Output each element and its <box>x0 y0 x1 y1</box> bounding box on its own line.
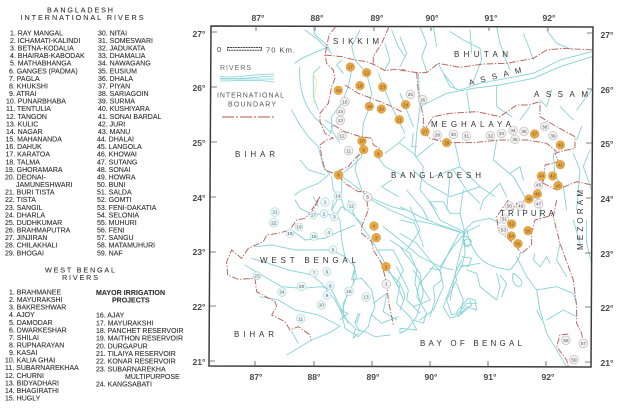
markers: lower west quadrant: 7 <box>313 271 316 276</box>
markers: upper east quadrant: 46 <box>535 192 540 197</box>
list: irrigation projects: 21. TILAIYA RESERVOIR <box>96 351 176 358</box>
list: West Bengal rivers: 10. KALIA GHAI <box>5 358 55 365</box>
markers: upper east quadrant: 50 <box>507 204 512 209</box>
list: Bangladesh rivers column 2: 34. NAWAGANG <box>98 61 151 68</box>
list: West Bengal rivers: 4. AJOY <box>9 312 35 319</box>
list: Bangladesh rivers column 2: 41. SONAI BARDAL <box>98 114 162 121</box>
list: Bangladesh rivers column 1: 2. ICHAMATI-KALINDI <box>10 38 80 45</box>
place labels: BAY OF BENGAL <box>420 339 523 348</box>
markers: lower west quadrant: 5 <box>332 247 335 252</box>
heading: Bangladesh international rivers: INTERNATIONAL RIVERS <box>20 13 144 22</box>
longitude and latitude labels: 89° <box>366 372 380 382</box>
markers: upper east quadrant: 30 <box>451 132 456 137</box>
list: Bangladesh rivers column 1: 10. PUNARBHABA <box>6 99 66 106</box>
map ticks <box>209 26 593 366</box>
markers: lower east quadrant: 59 <box>571 357 577 362</box>
list: Bangladesh rivers column 1: 27. JINJIRAN <box>5 235 47 242</box>
longitude and latitude labels: 91° <box>484 13 498 23</box>
markers: upper east quadrant: 47 <box>536 201 542 206</box>
markers: upper west quadrant: 8 <box>377 151 380 156</box>
longitude and latitude labels: 21° <box>600 358 614 368</box>
list: Bangladesh rivers column 1: 22. TISTA <box>5 197 36 204</box>
markers: lower west quadrant: 15 <box>346 289 352 294</box>
longitude and latitude labels: 22° <box>192 302 206 312</box>
list: Bangladesh rivers column 1: 15. MAHANANDA <box>6 136 62 144</box>
list: Bangladesh rivers column 2: 52. GOMTI <box>97 197 132 204</box>
list: Bangladesh rivers column 2: 53. FENI-DAKATIA <box>97 205 157 212</box>
markers: upper east quadrant: 39 <box>550 133 556 138</box>
longitude and latitude labels: 91° <box>484 372 497 382</box>
longitude and latitude labels: 25° <box>600 139 614 149</box>
markers: lower east quadrant: 58 <box>563 338 569 343</box>
heading: Mayor irrigation projects: PROJECTS <box>112 298 150 304</box>
heading: Mayor irrigation projects <box>96 290 165 304</box>
markers: lower west quadrant: 17 <box>311 213 316 218</box>
legend: scale and line keys: 70 Km. <box>266 46 295 54</box>
markers: lower west quadrant: 3 <box>375 235 378 240</box>
markers: lower west quadrant: 21 <box>272 210 278 215</box>
list: Bangladesh rivers column 1: 3. BETNA-KODALIA <box>10 46 74 52</box>
markers: upper east quadrant: 25 <box>408 92 413 97</box>
legend: scale and line keys: RIVERS <box>220 65 251 72</box>
markers: upper east quadrant: 48 <box>526 197 532 202</box>
list: Bangladesh rivers column 1: 13. KULIC <box>6 121 38 128</box>
markers: upper west quadrant: 22 <box>364 70 370 75</box>
markers: lower east quadrant: 54 <box>509 234 514 239</box>
list: Bangladesh rivers column 2: 39. SURMA <box>98 99 135 106</box>
legend: scale and line keys: BOUNDARY <box>228 102 276 108</box>
list: Bangladesh rivers column 1: 26. BRAHMAPUTRA <box>5 228 71 234</box>
longitude and latitude labels: 25° <box>192 138 206 148</box>
list: West Bengal rivers: 9. KASAI <box>9 350 37 357</box>
markers: upper east quadrant: 34 <box>510 128 516 133</box>
list: Bangladesh rivers column 2: 47. SUTANG <box>97 159 137 166</box>
markers: upper west quadrant: 12 <box>339 133 345 138</box>
markers: upper east quadrant: 32 <box>488 133 493 138</box>
list: West Bengal rivers: 1. BRAHMANEE <box>9 290 61 296</box>
list: Bangladesh rivers column 1: 23. SANGIL <box>5 205 42 212</box>
markers: upper east quadrant: 33 <box>499 131 504 136</box>
markers: lower west quadrant: 6 <box>326 269 329 274</box>
longitude and latitude labels: 23° <box>600 249 614 259</box>
markers: lower west quadrant: 1 <box>324 200 327 205</box>
markers: lower west quadrant: 22 <box>271 220 277 225</box>
list: Bangladesh rivers column 2: 55. MUHURI <box>97 220 137 227</box>
markers: upper west quadrant: 20 <box>379 107 384 112</box>
markers: upper west quadrant: 13 <box>338 118 343 123</box>
longitude and latitude labels: 26° <box>600 85 614 95</box>
list: Bangladesh rivers column 2: 46. KHOWAI <box>97 152 137 159</box>
heading: West Bengal rivers: RIVERS <box>62 273 98 282</box>
list: Bangladesh rivers column 1: 6. GANGES (PADMA) <box>9 68 78 75</box>
markers: upper east quadrant: 35 <box>512 137 518 142</box>
markers: upper west quadrant: 19 <box>367 104 372 109</box>
markers: lower east quadrant: 57 <box>581 341 586 346</box>
markers: upper east quadrant: 29 <box>444 140 450 145</box>
markers: lower west quadrant: 11 <box>298 316 303 321</box>
list: Bangladesh rivers column 2: 35. EUSIUM <box>98 68 137 75</box>
international boundaries <box>227 27 593 367</box>
list: Bangladesh rivers column 1: 16. DAHUK <box>6 144 42 151</box>
list: Bangladesh rivers column 2: 54. SELONIA <box>97 212 139 219</box>
longitude and latitude labels: 24° <box>600 194 614 204</box>
longitude and latitude labels: 89° <box>370 13 384 23</box>
markers: lower west quadrant: 18 <box>287 231 293 236</box>
longitude and latitude labels: 92° <box>542 13 556 23</box>
list: Bangladesh rivers column 2 <box>97 30 162 257</box>
markers: upper west quadrant: 5 <box>366 195 369 200</box>
legend: scale and line keys: INTERNATIONAL <box>217 92 284 100</box>
place labels: BANGLADESH <box>391 171 481 180</box>
list: Bangladesh rivers column 2: 31. SOMESWARI <box>98 38 153 45</box>
rivers network <box>245 27 592 367</box>
place labels: SIKKIM <box>333 37 379 46</box>
list: Bangladesh rivers column 2: 57. SANGU <box>97 235 134 242</box>
longitude and latitude labels: 24° <box>192 193 206 203</box>
longitude and latitude labels: 27° <box>192 29 206 39</box>
list: Bangladesh rivers column 2: 37. PIYAN <box>98 84 130 90</box>
markers: lower west quadrant <box>253 198 391 323</box>
markers: upper east quadrant: 40 <box>558 143 563 148</box>
longitude and latitude labels: 87° <box>250 372 263 382</box>
list: Bangladesh rivers column 1: 5. MATHABHANGA <box>10 61 72 68</box>
list: West Bengal rivers: 12. CHURNI <box>5 373 44 380</box>
list: Bangladesh rivers column 2: 56. FENI <box>97 228 125 234</box>
map frame <box>209 26 593 367</box>
list: irrigation projects: 22. KONAR RESERVOIR <box>96 359 176 366</box>
list: Bangladesh rivers column 1: 8. KHUKSHI <box>9 84 48 90</box>
markers: upper west quadrant: 14 <box>335 193 341 198</box>
markers: lower east quadrant: 55 <box>515 241 521 246</box>
list: Bangladesh rivers column 2: 59. NAF <box>97 250 123 257</box>
markers: lower west quadrant: 16 <box>311 234 317 239</box>
markers: lower west quadrant: 9 <box>326 293 329 298</box>
longitude and latitude labels: 88° <box>308 372 321 382</box>
list: Bangladesh rivers column 1: 17. KARATOA <box>6 152 50 159</box>
markers: upper west quadrant: 6 <box>337 173 340 178</box>
list: Bangladesh rivers column 1: 24. DHARLA <box>5 212 45 219</box>
list: Bangladesh rivers column 2: 38. SARIAGOIN <box>98 91 149 98</box>
place labels: ASSAM <box>534 90 588 99</box>
markers: upper east quadrant: 28 <box>435 133 440 138</box>
list: Bangladesh rivers column 1: 7. PAGLA <box>9 76 40 83</box>
longitude and latitude labels: 27° <box>600 30 614 40</box>
list: West Bengal rivers: 13. BIDYADHARI <box>5 380 59 387</box>
list: Bangladesh rivers column 2: 42. JURI <box>98 121 125 128</box>
list: Bangladesh rivers column 1: 9. ATRAI <box>9 91 37 98</box>
list: irrigation projects: MULTIPURPOSE <box>125 374 180 381</box>
markers: lower west quadrant: 23 <box>254 273 260 278</box>
heading: West Bengal rivers: WEST BENGAL <box>45 266 115 274</box>
legend: scale and line keys: 0 <box>217 45 221 54</box>
markers: lower west quadrant: 20 <box>299 284 305 289</box>
list: Bangladesh rivers column 2: 50. BUNI <box>97 182 125 189</box>
list: Bangladesh rivers column 1: 28. CHILAKHALI <box>5 243 58 250</box>
place labels: MEZORAM <box>576 190 585 250</box>
markers: upper east quadrant: 38 <box>542 124 548 129</box>
markers: upper west quadrant: 9 <box>362 147 365 152</box>
markers: upper west quadrant: 21 <box>397 117 402 122</box>
list: Bangladesh rivers column 2: 44. DHALAI <box>97 136 134 144</box>
markers: lower west quadrant: 4 <box>373 224 376 229</box>
list: irrigation projects: 24. KANGSABATI <box>96 382 152 389</box>
list: Bangladesh rivers column 2: 45. LANGOLA <box>97 144 142 151</box>
list: Bangladesh rivers column 2: 36. DHALA <box>98 76 133 83</box>
longitude and latitude labels: 21° <box>192 357 206 367</box>
list: Bangladesh rivers column 2: 30. NITAI <box>98 30 127 37</box>
markers: upper west quadrant <box>334 63 404 201</box>
markers: lower west quadrant: 13 <box>363 295 369 300</box>
markers: lower east quadrant: 53 <box>501 228 506 233</box>
place labels <box>234 37 588 348</box>
list: West Bengal rivers: 14. BHAGIRATHI <box>5 388 59 395</box>
list: irrigation projects: 16. AJAY <box>96 313 125 320</box>
markers: lower east quadrant: 51 <box>502 217 507 222</box>
place labels: BHUTAN <box>454 50 508 59</box>
place labels: BIHAR <box>234 330 274 339</box>
markers: lower west quadrant: 12 <box>349 204 354 209</box>
list: Bangladesh rivers column 1: 18. TALMA <box>6 159 40 166</box>
list: Bangladesh rivers column 1: JAMUNESHWARI <box>16 182 73 189</box>
list: Bangladesh rivers column 1: 1. RAY MANGAL <box>10 30 63 37</box>
longitude and latitude labels: 26° <box>192 83 206 93</box>
markers: upper west quadrant: 17 <box>348 65 353 70</box>
longitude and latitude labels: 92° <box>542 372 555 382</box>
list: Bangladesh rivers column 1 <box>5 30 85 257</box>
list: West Bengal rivers <box>5 290 79 402</box>
place labels: BIHAR <box>235 150 275 159</box>
markers: upper west quadrant: 23 <box>380 85 386 90</box>
list: Bangladesh rivers column 2: 40. KUSHIYARA <box>98 106 150 113</box>
list: irrigation projects: 19. MAITHON RESERVOIR <box>96 336 183 343</box>
longitude and latitude labels: 22° <box>600 303 614 313</box>
longitude and latitude labels: 88° <box>310 13 324 23</box>
list: Bangladesh rivers column 1: 19. GHORAMARA <box>5 167 63 174</box>
list: Bangladesh rivers column 1: 20. DEONAI- <box>5 174 47 182</box>
list: Bangladesh rivers column 2: 43. MANU <box>98 129 130 136</box>
markers: upper east quadrant: 44 <box>539 174 544 179</box>
markers: lower east quadrant: 52 <box>509 222 515 227</box>
list: Bangladesh rivers column 2: 33. DHAMALIA <box>98 53 146 60</box>
list: Bangladesh rivers column 1: 21. BURI TISTA <box>5 190 55 197</box>
list: Bangladesh rivers column 1: 11. TENTULIA <box>6 106 51 113</box>
markers: lower east quadrant: 56 <box>525 228 531 233</box>
list: West Bengal rivers: 7. SHILAI <box>9 335 39 342</box>
markers: upper east quadrant: 37 <box>532 132 538 137</box>
longitude and latitude labels: 23° <box>192 247 206 257</box>
markers: upper west quadrant: 11 <box>346 148 351 153</box>
list: West Bengal rivers: 8. RUPNARAYAN <box>9 342 64 350</box>
markers: lower west quadrant: 8 <box>329 283 332 288</box>
longitude and latitude labels: 90° <box>426 13 439 23</box>
list: irrigation projects: 18. PANCHET RESERVOIR <box>96 328 184 335</box>
list: Bangladesh rivers column 1: 4. BHAIRAB-KABODAK <box>10 53 85 60</box>
markers: lower west quadrant: 4 <box>327 230 330 235</box>
list: Bangladesh rivers column 2: 49. HOWRA <box>97 174 136 182</box>
markers: lower west quadrant: 1 <box>385 282 388 287</box>
longitude and latitude labels: 87° <box>252 13 265 23</box>
list: Bangladesh rivers column 2: 51. SALDA <box>97 190 132 197</box>
markers: upper east quadrant: 45 <box>536 183 542 188</box>
longitude and latitude labels: 90° <box>424 372 438 382</box>
list: West Bengal rivers: 5. DAMODAR <box>9 320 53 327</box>
markers: lower west quadrant: 2 <box>385 264 388 269</box>
markers: lower west quadrant: 24 <box>279 290 285 295</box>
markers: upper east quadrant: 49 <box>518 204 524 209</box>
list: West Bengal rivers: 6. DWARKESHAR <box>9 327 67 334</box>
markers: upper west quadrant: 16 <box>342 99 348 104</box>
place labels: ASSAM <box>468 66 523 87</box>
markers: upper east quadrant: 26 <box>420 97 426 102</box>
place labels: MEGHALAYA <box>431 120 512 129</box>
place labels: WEST BENGAL <box>260 256 357 265</box>
list: irrigation projects <box>96 313 184 389</box>
heading: Bangladesh international rivers: BANGLADESH <box>47 6 113 14</box>
list: West Bengal rivers: 2. MAYURAKSHI <box>9 297 63 304</box>
heading: Mayor irrigation projects: MAYOR IRRIGATION <box>96 290 165 297</box>
markers: lower east quadrant <box>499 215 588 364</box>
list: Bangladesh rivers column 2: 48. SONAI <box>97 167 131 174</box>
place labels: TRIPURA <box>500 209 555 218</box>
markers: upper east quadrant: 31 <box>464 134 469 139</box>
list: Bangladesh rivers column 1: 25. DUDHKUMAR <box>5 220 62 227</box>
heading: Bangladesh international rivers <box>20 6 144 22</box>
list: West Bengal rivers: 3. BAKRESHWAR <box>9 305 66 312</box>
markers: upper west quadrant: 10 <box>359 139 365 144</box>
markers: upper east quadrant: 42 <box>550 174 556 179</box>
legend: scale and line keys <box>217 45 295 117</box>
list: Bangladesh rivers column 1: 29. BHOGAI <box>5 250 44 257</box>
markers: upper east quadrant: 36 <box>521 129 527 134</box>
list: Bangladesh rivers column 1: 12. TANGON <box>6 114 47 121</box>
markers: upper east quadrant: 27 <box>422 129 428 134</box>
markers: upper west quadrant: 15 <box>336 88 341 93</box>
list: irrigation projects: 17. MAYURAKSHI <box>96 320 153 327</box>
list: Bangladesh rivers column 1: 14. NAGAR <box>6 129 43 136</box>
list: West Bengal rivers: 11. SUBARNAREKHAA <box>5 365 79 372</box>
markers: upper west quadrant: 18 <box>357 83 363 88</box>
markers: upper east quadrant: 43 <box>555 183 561 188</box>
heading: West Bengal rivers <box>45 266 115 282</box>
list: Bangladesh rivers column 2: 32. JADUKATA <box>98 46 146 52</box>
markers: lower west quadrant: 10 <box>319 303 324 308</box>
markers: upper west quadrant: 14 <box>338 109 344 114</box>
markers: lower west quadrant: 19 <box>296 225 302 230</box>
longitude and latitude labels <box>192 13 614 382</box>
markers: upper east quadrant <box>401 90 565 210</box>
list: irrigation projects: 20. DURGAPUR <box>96 343 148 350</box>
list: irrigation projects: 23. SUBARNAREKHA <box>96 366 166 373</box>
list: West Bengal rivers: 15. HUGLY <box>5 396 41 402</box>
markers: upper east quadrant: 41 <box>558 162 563 167</box>
markers: lower west quadrant: 3 <box>333 215 336 220</box>
markers: lower west quadrant: 2 <box>323 211 326 216</box>
list: Bangladesh rivers column 2: 58. MATAMUHURI <box>97 243 155 250</box>
markers: upper east quadrant: 24 <box>403 102 409 107</box>
